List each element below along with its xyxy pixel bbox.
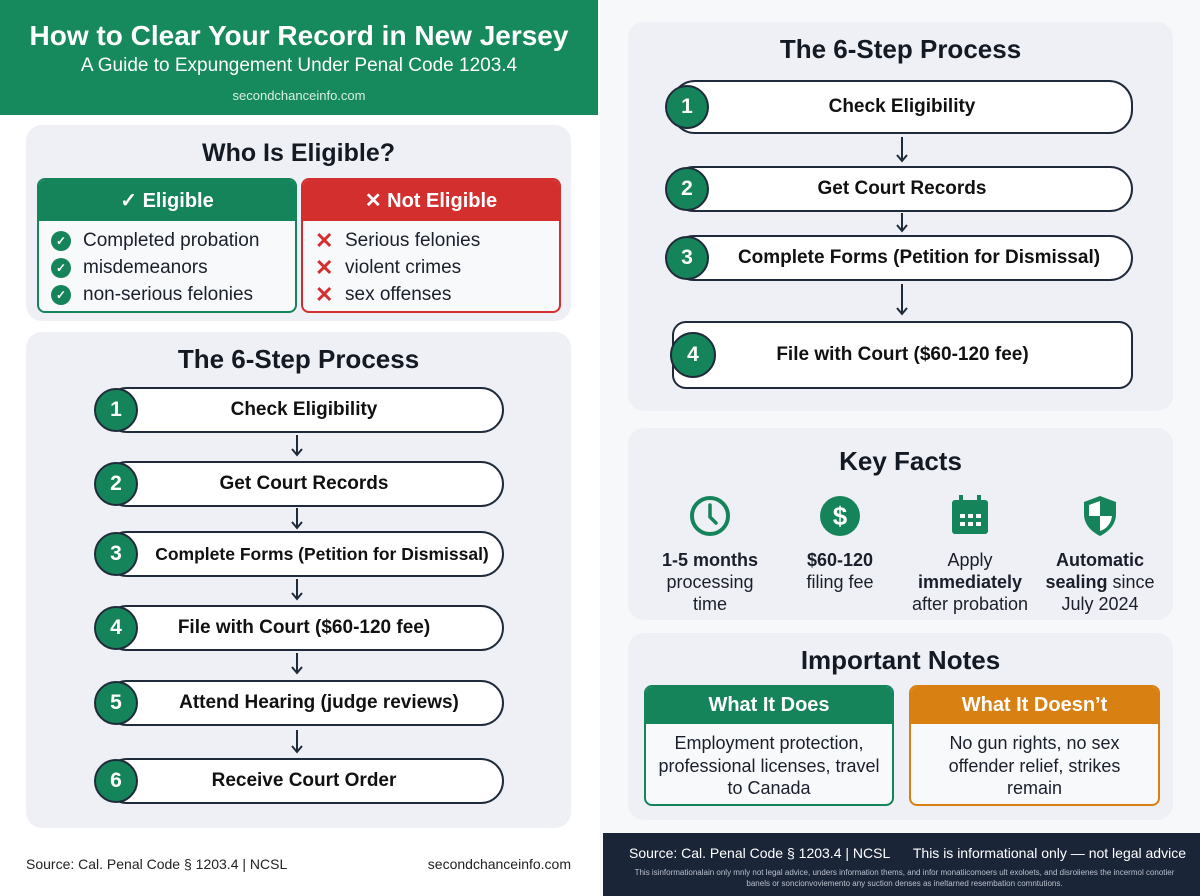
step 5: Attend Hearing (judge reviews) (179, 692, 459, 713)
arrow (291, 653, 303, 674)
what it does box (644, 685, 894, 806)
step 6: 6 (110, 769, 122, 792)
fact: processing time: 1-5 months (662, 550, 758, 570)
arrow (896, 213, 908, 232)
fact: apply immediately: after probation (912, 594, 1028, 614)
fact: apply immediately: immediately (918, 572, 1022, 592)
fact: processing time (662, 496, 758, 614)
step 4 (94, 605, 504, 651)
fact: apply immediately: Apply (947, 550, 993, 570)
step 4: File with Court ($60-120 fee) (178, 617, 430, 638)
right step 3: Complete Forms (Petition for Dismissal) (738, 247, 1100, 268)
footer right (dark): This is informational only — not legal advice (913, 845, 1186, 861)
step 3 (94, 531, 504, 577)
right step 1: 1 (681, 95, 693, 118)
footer right (dark) (603, 833, 1200, 896)
eligible box: ✓ (56, 288, 66, 302)
source and disclaimer: Source: Cal. Penal Code § 1203.4 | NCSL (629, 845, 890, 861)
not eligible box: ✕ (315, 254, 333, 280)
subtitle: A Guide to Expungement Under Penal Code 1203.4 (81, 55, 517, 76)
heading: Important Notes (801, 645, 1000, 675)
what it does box: Employment protection, professional licenses, travel to Canada (658, 733, 880, 798)
right step 1 (665, 80, 1133, 134)
step 2: 2 (110, 472, 122, 495)
arrow (896, 284, 908, 316)
footer left: Source: Cal. Penal Code § 1203.4 | NCSL (26, 856, 287, 872)
header banner (0, 0, 598, 115)
step 1: Check Eligibility (231, 399, 377, 420)
fact: automatic sealing (1045, 496, 1155, 614)
panel: who is eligible (26, 125, 571, 321)
what it doesn't box: No gun rights, no sex offender relief, strikes remain (949, 733, 1120, 798)
not eligible box: ✕ (315, 228, 333, 252)
eligible box: ✓ Eligible (120, 190, 214, 212)
fact: automatic sealing: Automatic (1056, 550, 1144, 570)
fact: filing fee: $60-120 (807, 550, 873, 570)
what it doesn't box (909, 685, 1160, 806)
arrow (291, 730, 303, 754)
step 3: Complete Forms (Petition for Dismissal) (155, 544, 489, 564)
fact: apply immediately (912, 495, 1028, 614)
right step 4 (670, 321, 1133, 389)
fact: automatic sealing: July 2024 (1061, 594, 1139, 614)
panel: 6-step process (right) (628, 22, 1173, 411)
eligible box: misdemeanors (83, 256, 208, 278)
step 1 (94, 387, 504, 433)
what it does box: What It Does (708, 694, 830, 716)
right step 1: Check Eligibility (829, 96, 975, 117)
eligible box: ✓ (56, 260, 66, 274)
eligible box: ✓ (56, 234, 66, 248)
right step 2: 2 (681, 177, 693, 200)
arrow (291, 508, 303, 530)
step 1: 1 (110, 398, 122, 421)
right step 2: Get Court Records (818, 178, 986, 199)
footer left: secondchanceinfo.com (428, 856, 571, 872)
step 4: 4 (110, 616, 122, 639)
not eligible box (301, 178, 561, 313)
fact: automatic sealing: sealing since (1045, 572, 1155, 592)
footer left (26, 856, 571, 872)
not eligible box: Serious felonies (345, 230, 480, 250)
right step 3: 3 (681, 246, 693, 269)
step 5 (94, 680, 504, 726)
right step 4: File with Court ($60-120 fee) (776, 344, 1029, 365)
fact: filing fee: $ (833, 501, 848, 531)
not eligible box: ✕ Not Eligible (365, 190, 497, 212)
what it doesn't box: What It Doesn’t (962, 694, 1107, 716)
panel: 6-step process (left) (26, 332, 571, 828)
fact: filing fee (806, 496, 874, 592)
right step 3 (665, 235, 1133, 281)
step 6 (94, 758, 504, 804)
title: How to Clear Your Record in New Jersey (30, 20, 568, 51)
right step 2 (665, 166, 1133, 212)
arrow (291, 579, 303, 600)
step 2: Get Court Records (220, 473, 388, 494)
heading: Key Facts (839, 446, 962, 476)
step 6: Receive Court Order (212, 770, 396, 791)
eligible box: non-serious felonies (83, 284, 253, 304)
fact: processing time: time (693, 594, 727, 614)
not eligible box: ✕ (315, 282, 333, 306)
arrow (291, 435, 303, 456)
panel: key facts (628, 428, 1173, 620)
heading: who is eligible: Who Is Eligible? (202, 139, 395, 167)
step 5: 5 (110, 691, 122, 714)
not eligible box: sex offenses (345, 284, 451, 304)
fact: filing fee: filing fee (806, 572, 874, 592)
eligible box (37, 178, 297, 313)
step 2 (94, 461, 504, 507)
not eligible box: violent crimes (345, 256, 461, 278)
right step 4: 4 (687, 343, 699, 366)
right column background (600, 0, 1200, 896)
step 3: 3 (110, 542, 122, 565)
fine print: This isinformationalain only mnly not legal advice, unders information thems, and infor monatiicomoers ult exoloets, and disroiienes the incermol conotier banels or soncionvoviemento any suction denses as ineltarned resembation comntutions. (635, 868, 1174, 888)
heading: The 6-Step Process (780, 34, 1021, 64)
panel: important notes (628, 633, 1173, 820)
heading: The 6-Step Process (178, 344, 419, 374)
fact: processing time: processing (666, 572, 754, 592)
site url: secondchanceinfo.com (232, 88, 365, 103)
eligible box: Completed probation (83, 230, 259, 250)
arrow (896, 137, 908, 162)
